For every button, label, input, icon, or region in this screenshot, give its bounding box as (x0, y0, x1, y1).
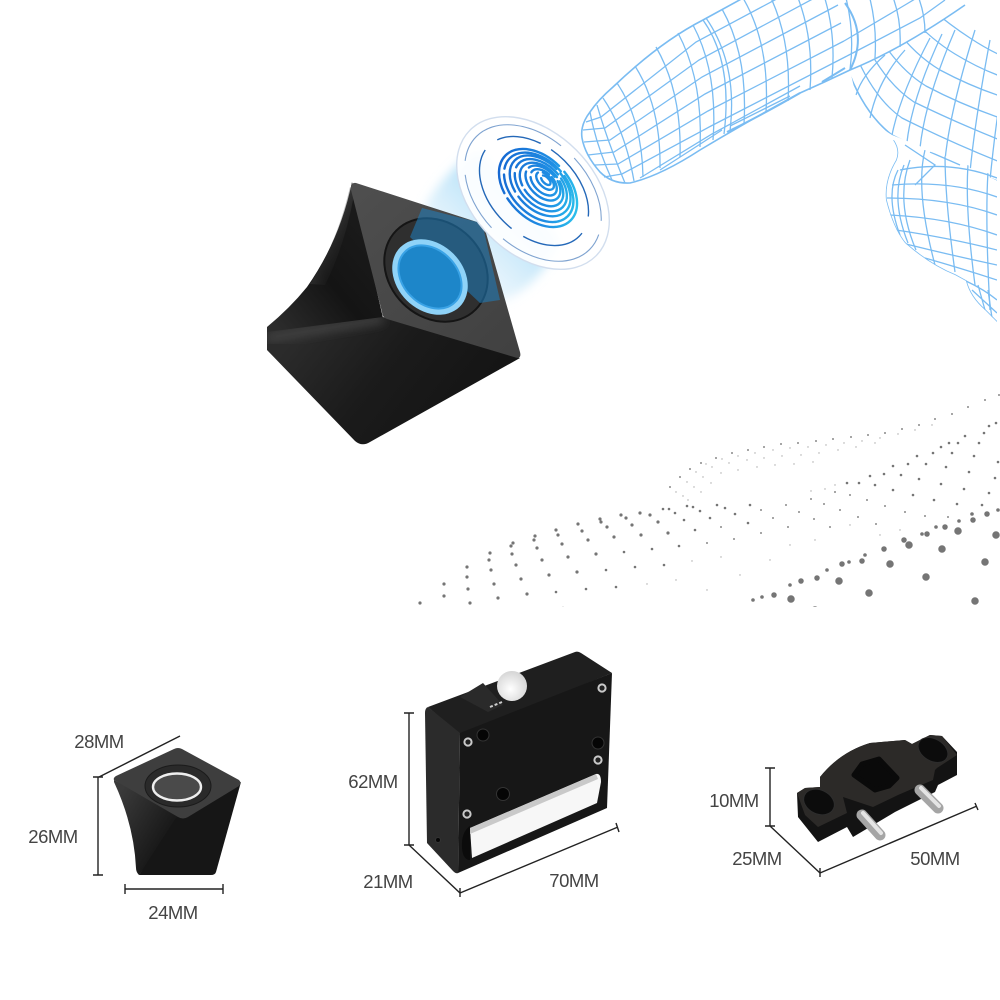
blue light on face (410, 208, 500, 303)
middle finger mesh (850, 8, 1000, 182)
left band dots (420, 513, 668, 609)
right hole (914, 732, 952, 768)
main lock (267, 182, 520, 444)
white ball (497, 671, 527, 701)
thumb mesh (886, 140, 1000, 325)
fingerprint beam (425, 150, 560, 300)
faint back dots (647, 425, 932, 590)
mounting holes (436, 729, 604, 842)
dimension 28MM (74, 731, 180, 777)
box top (428, 652, 612, 735)
strike plate body (797, 735, 957, 842)
lock underside (267, 317, 520, 444)
strip shade (470, 774, 598, 834)
dimension 10MM (709, 768, 775, 826)
knob left side (114, 780, 182, 875)
small knob with dimensions (28, 731, 241, 923)
fingerprint (484, 134, 592, 242)
sensor centre (386, 233, 474, 321)
index finger mesh (582, 0, 965, 183)
dimension 70MM: 70MM (549, 870, 599, 891)
sensor recess (363, 197, 509, 343)
dimension 21MM: 21MM (363, 871, 413, 892)
screws (463, 684, 606, 818)
ridge highlight (267, 319, 383, 338)
dimension 50MM: 50MM (910, 848, 960, 869)
ridge dots (556, 423, 998, 608)
knob right side (139, 782, 241, 875)
dimension 70MM (460, 823, 619, 897)
strike plate top (797, 735, 957, 827)
large dots (791, 531, 996, 610)
knob recess (145, 765, 211, 807)
dimension 10MM: 10MM (709, 790, 759, 811)
left hole (799, 784, 839, 820)
inner dashed ring (458, 115, 610, 267)
dimension 25MM: 25MM (732, 848, 782, 869)
dimension 26MM (28, 777, 103, 875)
square hole (854, 759, 897, 790)
fingerprint disc (427, 87, 639, 299)
side highlight (310, 187, 354, 285)
dimension 26MM: 26MM (28, 826, 78, 847)
outer dashed ring (438, 98, 628, 288)
dimension 62MM (348, 713, 414, 845)
wireframe hand (582, 0, 1000, 325)
dimension 62MM: 62MM (348, 771, 398, 792)
dimension 28MM: 28MM (74, 731, 124, 752)
latch (460, 683, 503, 712)
medium dots (774, 514, 987, 595)
strike plate with dimensions (709, 732, 978, 877)
strip cap (462, 826, 470, 860)
lock top face (351, 183, 520, 358)
latch contacts (490, 702, 502, 707)
lock flared side (267, 182, 383, 345)
disc outline (427, 87, 639, 299)
box left side (425, 707, 460, 873)
knob top face (114, 748, 240, 818)
box front (458, 673, 612, 873)
dot wave (420, 395, 999, 610)
small front dots (753, 510, 998, 600)
pins (862, 788, 939, 835)
sensor ring (377, 224, 483, 330)
knob ring (153, 774, 201, 800)
lock box with dimensions (348, 652, 619, 897)
dimension 21MM (363, 845, 460, 893)
white strip (470, 774, 601, 858)
dimension 24MM (125, 884, 223, 923)
dimension 50MM (820, 803, 978, 877)
dimension 25MM (732, 826, 820, 873)
middle dots (670, 395, 999, 543)
dimension 24MM: 24MM (148, 902, 198, 923)
